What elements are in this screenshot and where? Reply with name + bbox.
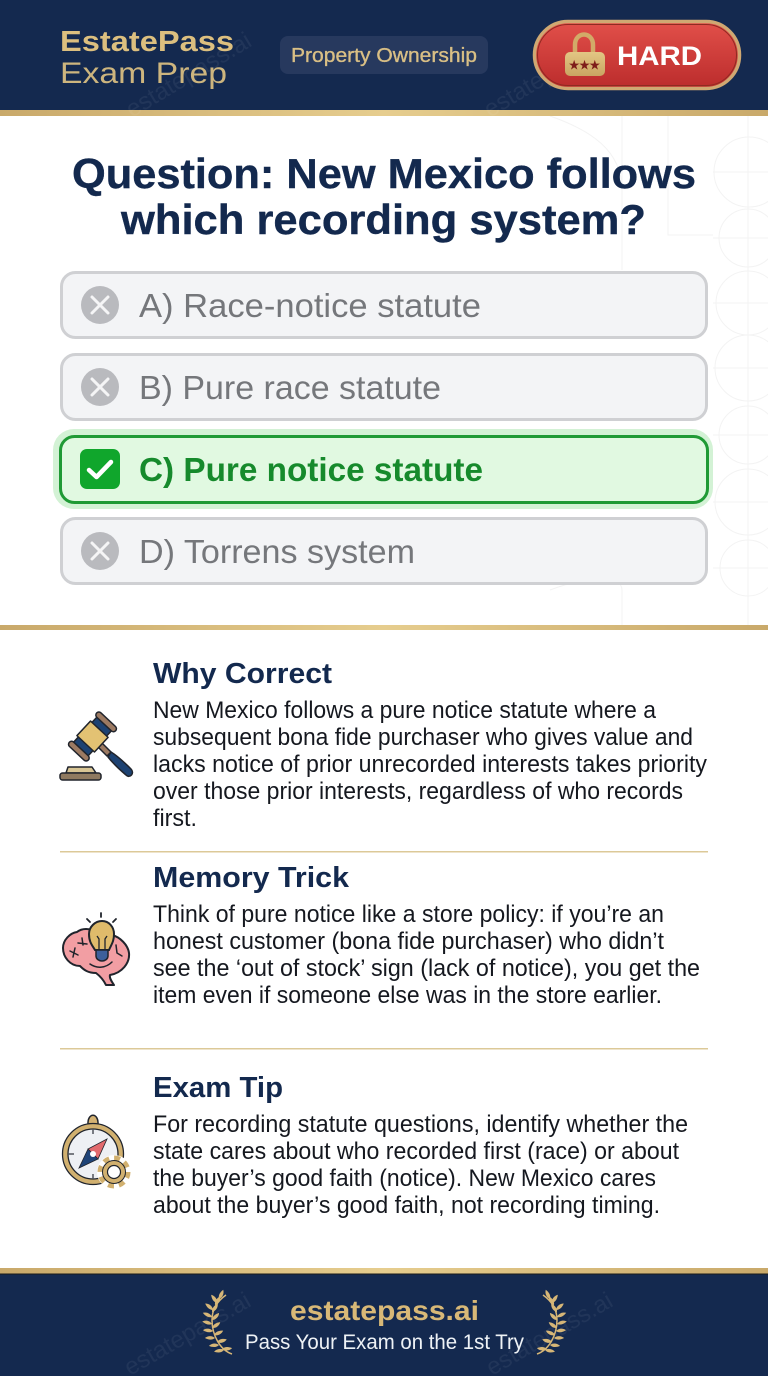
text block: Think of pure notice like a store policy: if you’re an [153,901,664,928]
text block: For recording statute questions, identify whether the [153,1111,688,1138]
category chip: Property Ownership [291,45,477,67]
option B [62,354,706,420]
icon: left laurel [202,1290,232,1354]
icon: cross [81,286,119,324]
panel: why correct: Why Correct [153,658,332,690]
logo: Exam Prep [60,57,227,90]
option C correct [53,429,713,509]
category chip [280,36,488,74]
title: Question: New Mexico follows [72,150,696,197]
icon: padlock [565,34,605,76]
icon: brain with bulb [63,913,129,985]
footer bar [0,1268,768,1376]
option D [62,518,706,584]
text block: New Mexico follows a pure notice statute where a [153,697,657,724]
panel: memory trick [63,862,700,1009]
difficulty badge: HARD [617,41,702,71]
panel: exam tip: Exam Tip [153,1072,283,1104]
text block: the buyer’s good faith (notice). New Mexico cares [153,1165,656,1192]
logo: EstatePass [60,26,234,58]
option B: B) Pure race statute [139,369,441,406]
text block: subsequent bona fide purchaser who gives value and [153,724,693,751]
title [72,150,696,243]
difficulty badge [534,22,740,88]
text block [153,1111,688,1219]
logo [60,26,234,90]
option A: A) Race-notice statute [139,287,481,324]
icon: cross [81,532,119,570]
icon: check [80,449,120,489]
icon: compass with gear [62,1115,131,1189]
text block [153,901,700,1009]
footer brand: estatepass.ai [290,1295,479,1326]
text block: about the buyer’s good faith, not recording timing. [153,1192,660,1219]
text block: first. [153,805,197,832]
icon: cross [81,368,119,406]
text block: over those prior interests, regardless of who records [153,778,683,805]
text block: honest customer (bona fide purchaser) who didn’t [153,928,664,955]
panel: exam tip [62,1072,688,1219]
option A [62,272,706,338]
icon: right laurel [537,1290,567,1354]
title: which recording system? [120,196,646,243]
text block: state cares about who recorded first (race) or about [153,1138,679,1165]
text block [153,697,707,832]
icon: gavel [60,711,132,780]
footer tagline: Pass Your Exam on the 1st Try [245,1331,524,1354]
option C correct: C) Pure notice statute [139,451,483,488]
panel: memory trick: Memory Trick [153,862,350,894]
watermark: estatepass.ai [479,27,614,123]
text block: see the ‘out of stock’ sign (lack of notice), you get the [153,955,700,982]
icon: padlock: ★★★ [569,59,601,72]
panel: why correct [60,658,707,832]
text block: item even if someone else was in the store earlier. [153,982,662,1009]
watermark: estatepass.ai [121,27,256,123]
option D: D) Torrens system [139,533,415,570]
text block: lacks notice of prior unrecorded interests takes priority [153,751,707,778]
